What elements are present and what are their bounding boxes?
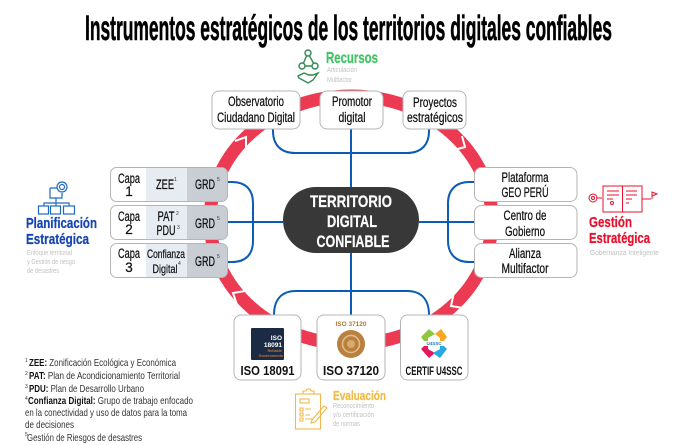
recursos boxes: Ciudadano Digital: [217, 110, 295, 125]
capa 2 row: 3: [177, 225, 180, 231]
heading: gestion estrategica: Estratégica: [589, 231, 651, 247]
footnotes: PDU: Plan de Desarrollo Urbano: [29, 383, 144, 395]
icon: recursos network and hand: [298, 50, 318, 83]
capa 2 row: 2: [125, 222, 133, 237]
heading: planificacion estrategica: Planificación: [26, 215, 97, 232]
capa 3 row: Digital: [152, 262, 178, 276]
gestion boxes: Gobierno: [505, 224, 545, 239]
gestion boxes: Alianza: [509, 246, 541, 261]
capa 1 row: Capa: [118, 171, 140, 186]
capa 1 row: 5: [217, 177, 220, 183]
capa 3 row: Capa: [118, 246, 140, 261]
icon: evaluacion clipboard: [296, 389, 327, 429]
evaluation card: ISO 18091: 18091: [264, 342, 282, 349]
capa 1 row: 1: [125, 184, 133, 199]
capa 3 row: Confianza: [147, 247, 185, 261]
footnotes: Gestión de Riesgos de desastres: [27, 432, 142, 444]
heading: gestion estrategica: [589, 215, 659, 257]
capa 3 row: GRD: [195, 254, 215, 269]
heading: planificacion estrategica: de desastres: [27, 268, 59, 275]
footnotes: en la conectividad y uso de datos para la toma: [25, 407, 187, 419]
heading: gestion estrategica: Gobernanza Inteligente: [590, 250, 659, 257]
capa 1 row: [110, 168, 228, 202]
recursos boxes: Observatorio: [228, 94, 284, 109]
evaluation card: ISO 37120: [317, 315, 385, 380]
heading: recursos: Recursos: [326, 50, 378, 67]
blue connectors: [228, 129, 474, 315]
capa 2 row: Capa: [118, 209, 140, 224]
icon: gestion book with gear and flag: [589, 186, 657, 212]
capa 3 row: 5: [217, 254, 220, 260]
footnotes: 5: [25, 432, 28, 438]
footnotes: 2: [25, 371, 28, 377]
footnotes: de decisiones: [25, 419, 74, 431]
heading: evaluacion: [333, 388, 386, 428]
heading: evaluacion: Evaluación: [333, 388, 386, 403]
evaluation card: ISO 18091: Reliable: [267, 349, 282, 353]
footnotes: [25, 357, 193, 444]
heading: recursos: Articulación: [327, 67, 357, 74]
capa 2 row: 2: [176, 211, 179, 217]
center pill: territorio digital confiable: DIGITAL: [327, 213, 377, 231]
center pill: territorio digital confiable: CONFIABLE: [316, 233, 390, 251]
heading: recursos: [326, 50, 378, 84]
evaluation card: ISO 18091: Governments: [259, 354, 283, 358]
capa 1 row: 1: [174, 177, 177, 183]
capa 2 row: PDU: [156, 223, 176, 238]
capa 1 row: ZEE: [156, 177, 174, 192]
heading: evaluacion: Reconocimiento: [333, 403, 374, 410]
icon: planificacion org chart: [38, 182, 74, 214]
recursos boxes: Proyectos: [413, 95, 457, 110]
recursos boxes: [212, 91, 466, 129]
evaluation card: ISO 18091: ISO: [271, 335, 282, 342]
heading: gestion estrategica: Gestión: [589, 215, 632, 231]
capa 3 row: 3: [125, 260, 133, 275]
footnotes: 3: [25, 384, 28, 390]
gestion boxes: Centro de: [504, 208, 546, 223]
gestion boxes: Multifactor: [502, 261, 549, 276]
capa 3 row: 4: [178, 261, 181, 267]
footnotes: ZEE: Zonificación Ecológica y Económica: [29, 357, 176, 369]
evaluation card: ISO 37120: ISO 37120: [336, 322, 367, 328]
heading: evaluacion: y/o certificación: [333, 412, 374, 419]
recursos boxes: digital: [338, 110, 366, 125]
heading: evaluacion: de normas: [333, 421, 360, 428]
center pill: territorio digital confiable: TERRITORIO: [310, 193, 392, 211]
heading: recursos: Multiactor: [327, 77, 353, 84]
evaluation card: CERTIF U4SSC: U4SSC: [426, 341, 442, 346]
gestion boxes: [474, 168, 577, 278]
recursos boxes: estratégicos: [407, 110, 463, 125]
footnotes: PAT: Plan de Acondicionamiento Territorial: [29, 370, 180, 382]
heading: planificacion estrategica: Enfoque territorial: [27, 250, 72, 257]
footnotes: Confianza Digital: Grupo de trabajo enfocado: [28, 395, 193, 407]
center pill: territorio digital confiable: [283, 187, 419, 253]
capa 3 row: [110, 244, 228, 278]
capa 2 row: 5: [217, 216, 220, 222]
evaluation card: ISO 18091: [234, 315, 301, 380]
heading: planificacion estrategica: Estratégica: [26, 231, 90, 248]
capa 2 row: PAT: [158, 209, 174, 224]
evaluation card: ISO 18091: ISO 18091: [240, 363, 294, 378]
red ring with arrows: [210, 96, 492, 344]
gestion boxes: Plataforma: [502, 170, 549, 185]
capa 2 row: [110, 206, 228, 240]
heading: planificacion estrategica: y Gestión de riesgo: [27, 259, 75, 266]
capa 2 row: GRD: [195, 216, 215, 231]
recursos boxes: Promotor: [332, 94, 372, 109]
capa 1 row: GRD: [195, 177, 215, 192]
footnotes: 4: [25, 396, 28, 402]
evaluation card: CERTIF U4SSC: CERTIF U4SSC: [406, 364, 463, 378]
footnotes: 1: [25, 358, 28, 364]
evaluation card: ISO 37120: ISO 37120: [323, 363, 379, 378]
gestion boxes: GEO PERÚ: [502, 185, 548, 200]
evaluation card: CERTIF U4SSC: [400, 315, 468, 380]
heading: planificacion estrategica: [26, 215, 97, 275]
